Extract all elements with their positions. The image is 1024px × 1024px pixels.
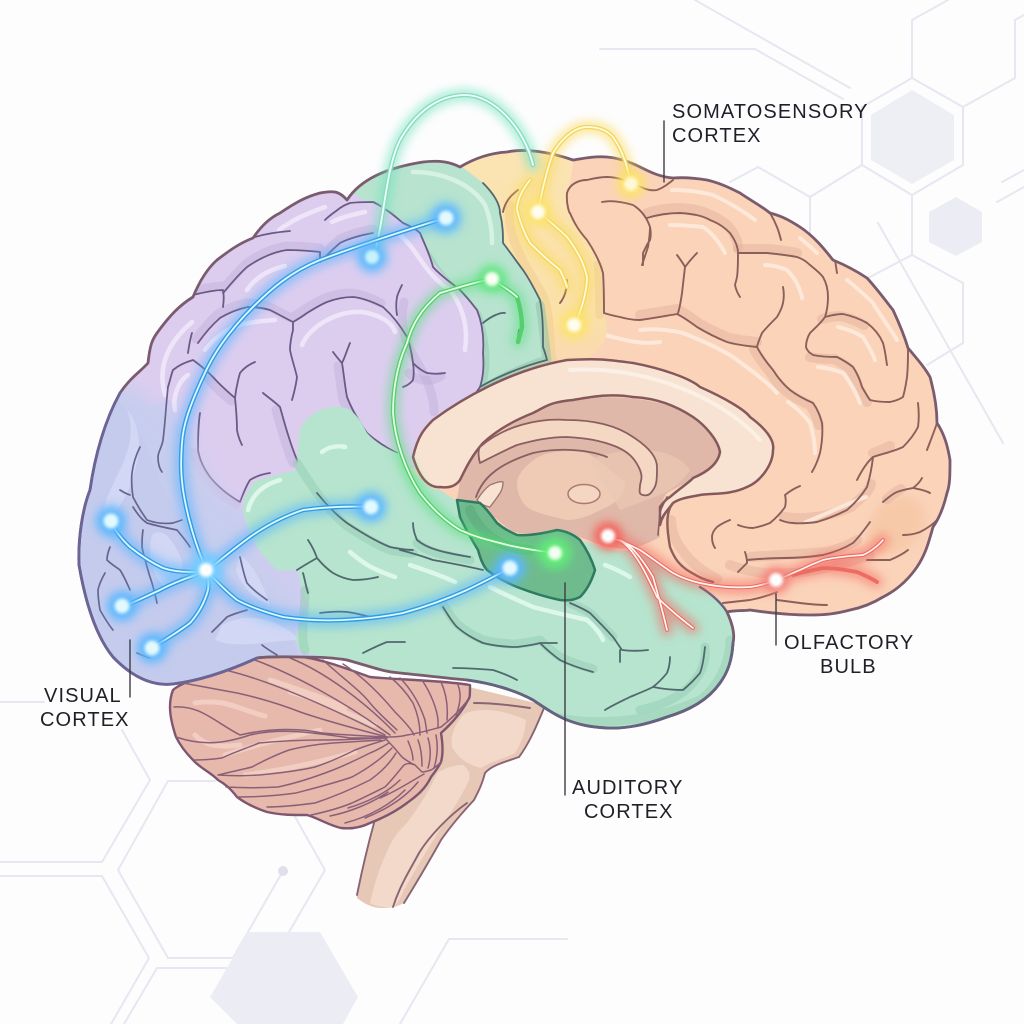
brainstem (357, 680, 544, 908)
pathway: yellow somatosensory arcs (517, 127, 645, 339)
frontal lobe: peach base (410, 158, 949, 614)
posterior underlay: blue-lilac (146, 400, 318, 656)
parietal sulci (168, 202, 483, 527)
cerebellum folia highlights (195, 680, 375, 775)
label: olfactory bulb: OLFACTORY (784, 632, 914, 654)
temporal sulci (297, 493, 705, 710)
temporal outline tint (467, 643, 733, 728)
red line (608, 537, 883, 630)
hexagon: small top right (929, 197, 982, 256)
callosum highlight (570, 369, 760, 440)
label: auditory cortex (565, 583, 683, 823)
label: auditory cortex: AUDITORY (572, 777, 683, 799)
corpus callosum (413, 359, 773, 582)
frontal lobe fold highlights (605, 190, 897, 522)
parietal fold highlights (162, 207, 466, 410)
label: visual cortex: VISUAL (44, 685, 122, 707)
label: auditory cortex: CORTEX (584, 801, 674, 823)
label: visual cortex (40, 640, 130, 731)
visual cortex: blue lobe (118, 385, 244, 510)
label: somatosensory cortex: SOMATOSENSORY (672, 101, 869, 123)
temporal outer edge (700, 587, 734, 643)
upper green shading and highlight (413, 172, 492, 243)
temporal lobe: green (243, 407, 740, 740)
crescent (477, 482, 503, 507)
frontal lobe fold shadows (640, 208, 901, 579)
visual cortex lighter gyri (103, 410, 300, 644)
cerebellum (170, 656, 470, 828)
fornix (478, 420, 657, 495)
hexagon: pale bottom (210, 932, 358, 1024)
yellow band shading (509, 205, 600, 360)
upper green region (354, 162, 546, 390)
occipital outline tint (79, 393, 257, 684)
inner brain: thalamus (517, 451, 625, 520)
pathway: teal arc (373, 95, 533, 258)
thalamus contour (476, 450, 607, 497)
cerebrum (50, 140, 960, 740)
red core (608, 537, 883, 630)
interthalamic ellipse (568, 484, 600, 504)
upper green contours (480, 183, 547, 387)
label: olfactory bulb (776, 594, 914, 678)
frontal loop edge (667, 503, 713, 582)
auditory cortex: dark green nucleus (457, 500, 595, 600)
red glow (608, 537, 883, 630)
pathway: green auditory arc (393, 265, 571, 569)
node dot (278, 866, 288, 876)
temporal fold shadows (297, 463, 730, 722)
label: somatosensory cortex (664, 101, 869, 182)
medulla highlight (370, 765, 469, 907)
brain lobes clipped to outline (50, 140, 960, 740)
label: olfactory bulb: BULB (820, 656, 877, 678)
frontal lobe sulci (602, 180, 937, 480)
parietal lobe: purple (100, 190, 483, 510)
orbital warm patch (868, 497, 925, 554)
hexagon: pale top right (871, 90, 954, 184)
pons highlight (452, 710, 526, 768)
label: somatosensory cortex: CORTEX (672, 125, 762, 147)
temporal fold highlights (248, 446, 630, 640)
yellow band contours (503, 177, 641, 313)
brainstem edge lines (658, 497, 667, 535)
inner brain: dark ring (457, 397, 720, 548)
pathway: olfactory red network (594, 522, 883, 630)
visual cortex sulci (98, 387, 277, 658)
label: visual cortex: CORTEX (40, 709, 130, 731)
parietal fold shadows (193, 229, 441, 505)
pathway: blue visual network (96, 203, 525, 663)
brain outline (79, 150, 950, 728)
somatosensory region: yellow band (462, 152, 606, 360)
